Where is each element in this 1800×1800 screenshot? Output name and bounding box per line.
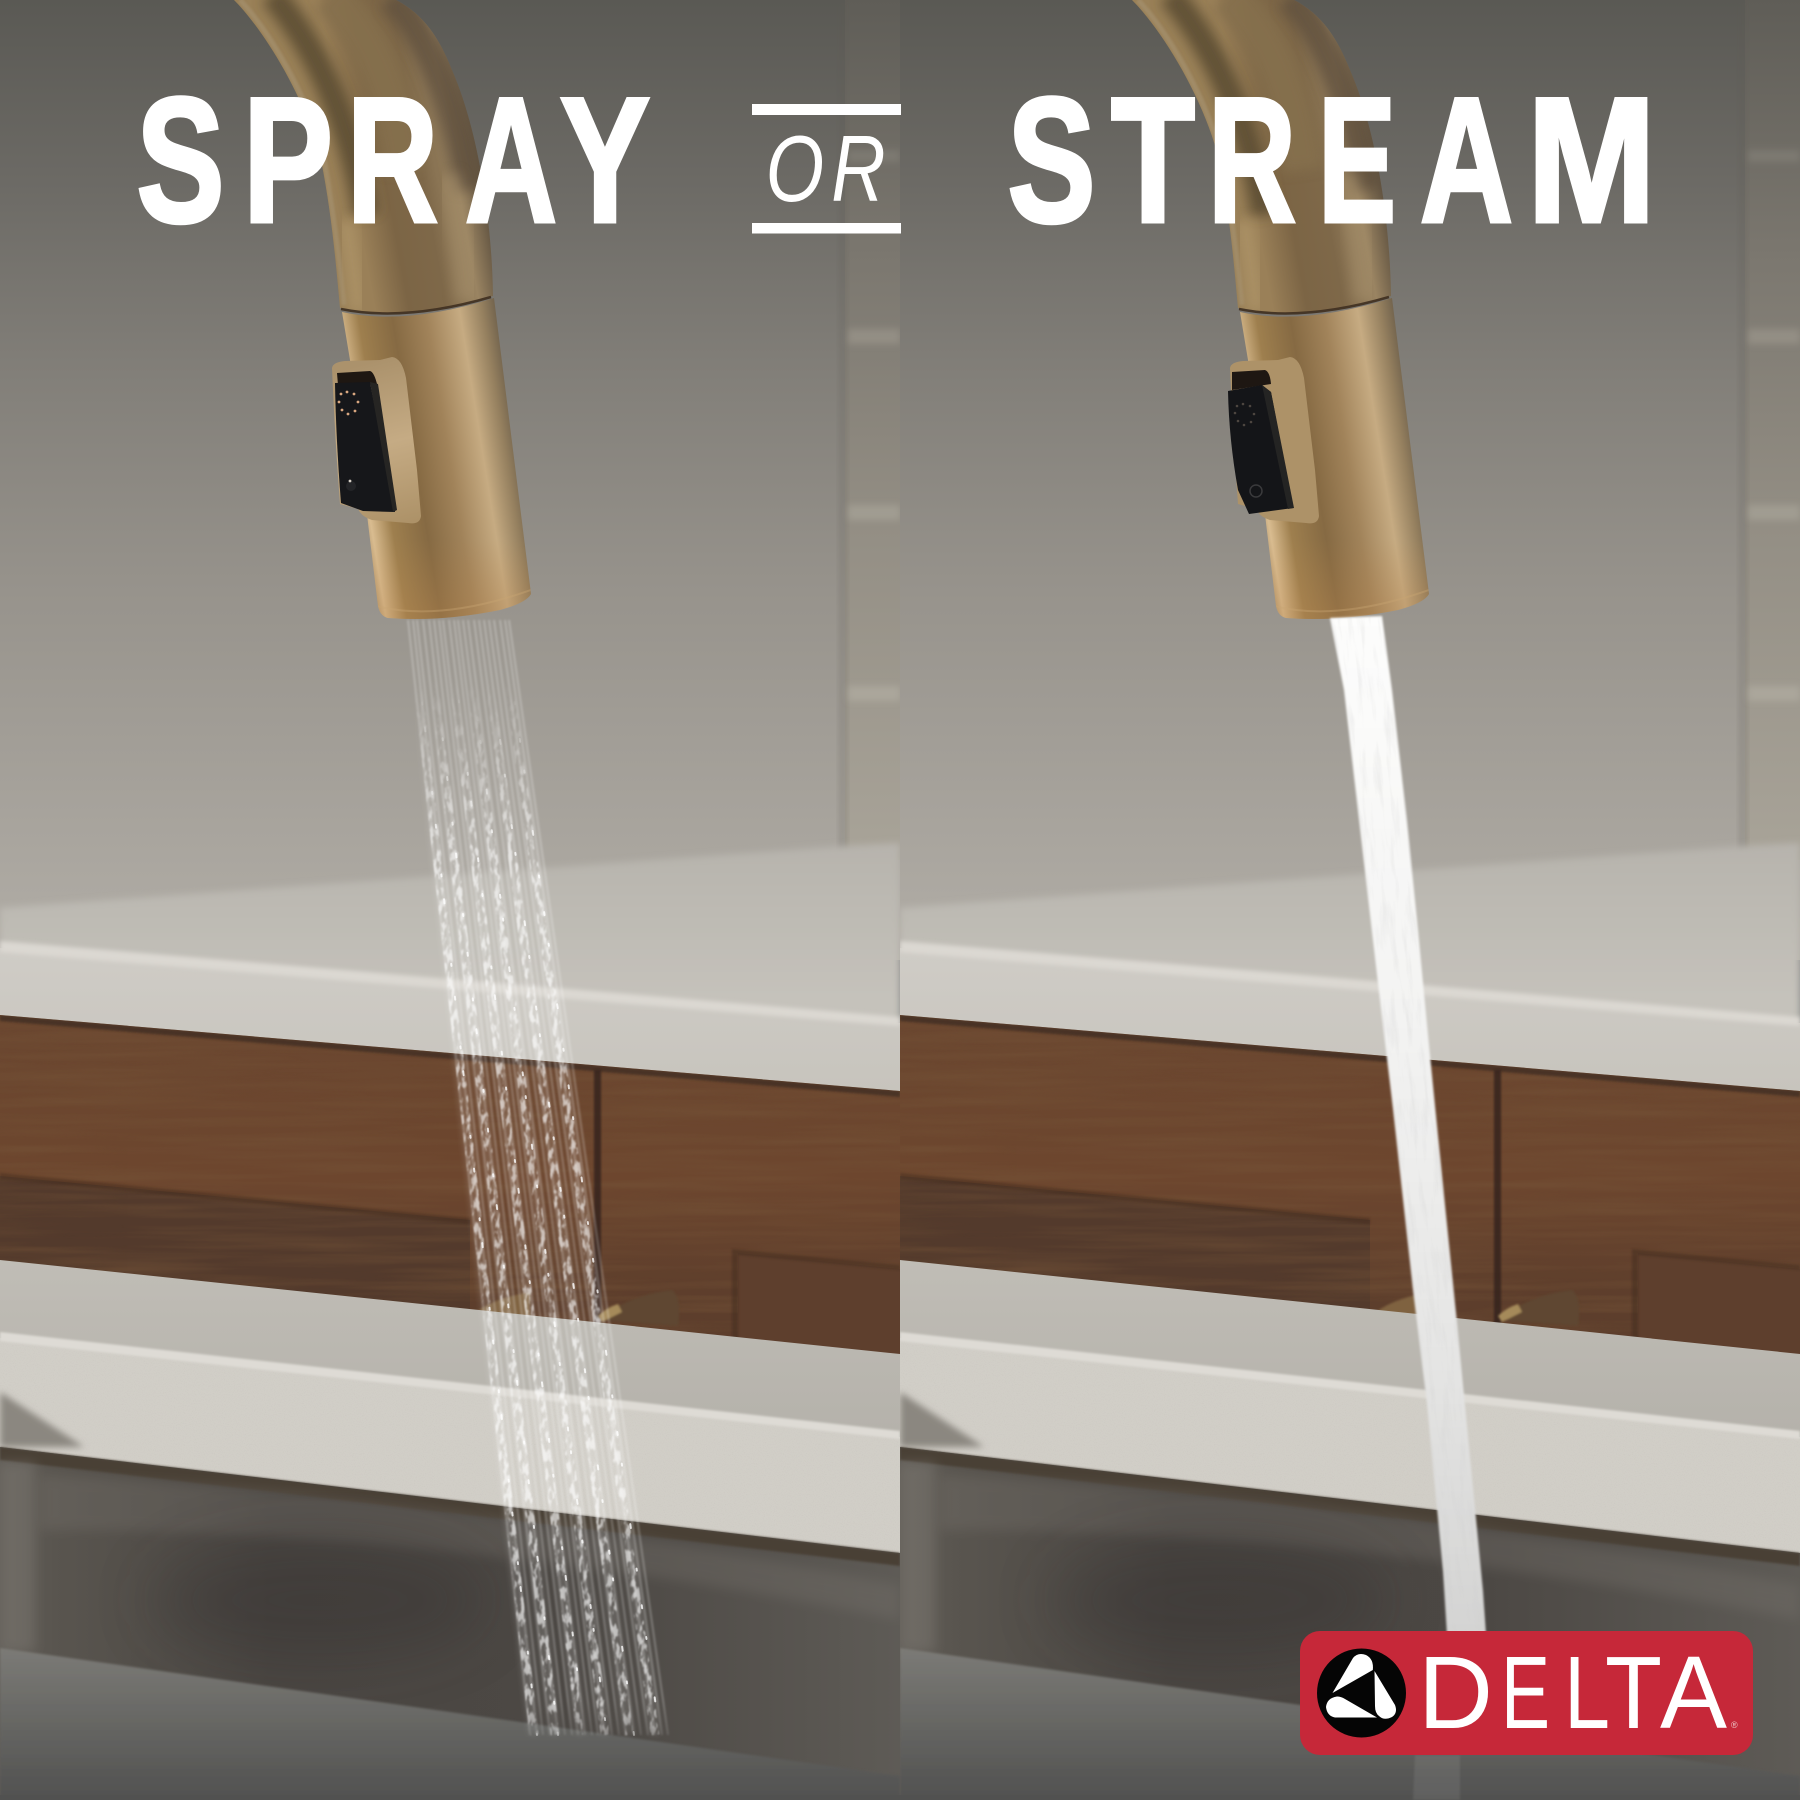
or divider bbox=[752, 104, 901, 234]
title word: spray: R bbox=[347, 60, 438, 260]
title word: stream: E bbox=[1318, 60, 1396, 260]
panel: stream bbox=[850, 0, 1800, 1800]
button trim bbox=[332, 357, 421, 523]
wordmark: D bbox=[1418, 1635, 1493, 1750]
wordmark: A bbox=[1660, 1635, 1727, 1750]
title word: spray: Y bbox=[560, 60, 650, 260]
title word: stream: S bbox=[1008, 60, 1096, 260]
faucet: spray side bbox=[234, 0, 540, 625]
wordmark: E bbox=[1501, 1635, 1550, 1750]
title word: spray: A bbox=[465, 60, 557, 260]
wordmark: L bbox=[1564, 1635, 1610, 1750]
icon: delta triangle mark bbox=[1317, 1648, 1406, 1738]
title word: stream: A bbox=[1420, 60, 1513, 260]
title word: stream: M bbox=[1527, 60, 1656, 260]
wordmark: T bbox=[1605, 1635, 1662, 1750]
toggle button bbox=[1228, 370, 1294, 514]
water: spray pattern bbox=[408, 620, 668, 1735]
title word: spray: S bbox=[136, 60, 224, 260]
kitchen background: spray side bbox=[0, 0, 950, 1800]
title word: spray: P bbox=[243, 60, 333, 260]
title word: stream: R bbox=[1208, 60, 1296, 260]
toggle button bbox=[335, 371, 397, 512]
kitchen background: stream side bbox=[850, 0, 1800, 1800]
logo: delta badge bbox=[1300, 1631, 1753, 1755]
registered mark: ® bbox=[1731, 1720, 1738, 1730]
faucet: stream side bbox=[1132, 0, 1438, 625]
button trim bbox=[1230, 357, 1319, 523]
stream reflection bbox=[1413, 1755, 1460, 1800]
or divider: OR bbox=[766, 117, 886, 222]
panel: spray bbox=[0, 0, 950, 1800]
title word: stream: T bbox=[1111, 60, 1195, 260]
water: stream bbox=[1328, 614, 1488, 1800]
